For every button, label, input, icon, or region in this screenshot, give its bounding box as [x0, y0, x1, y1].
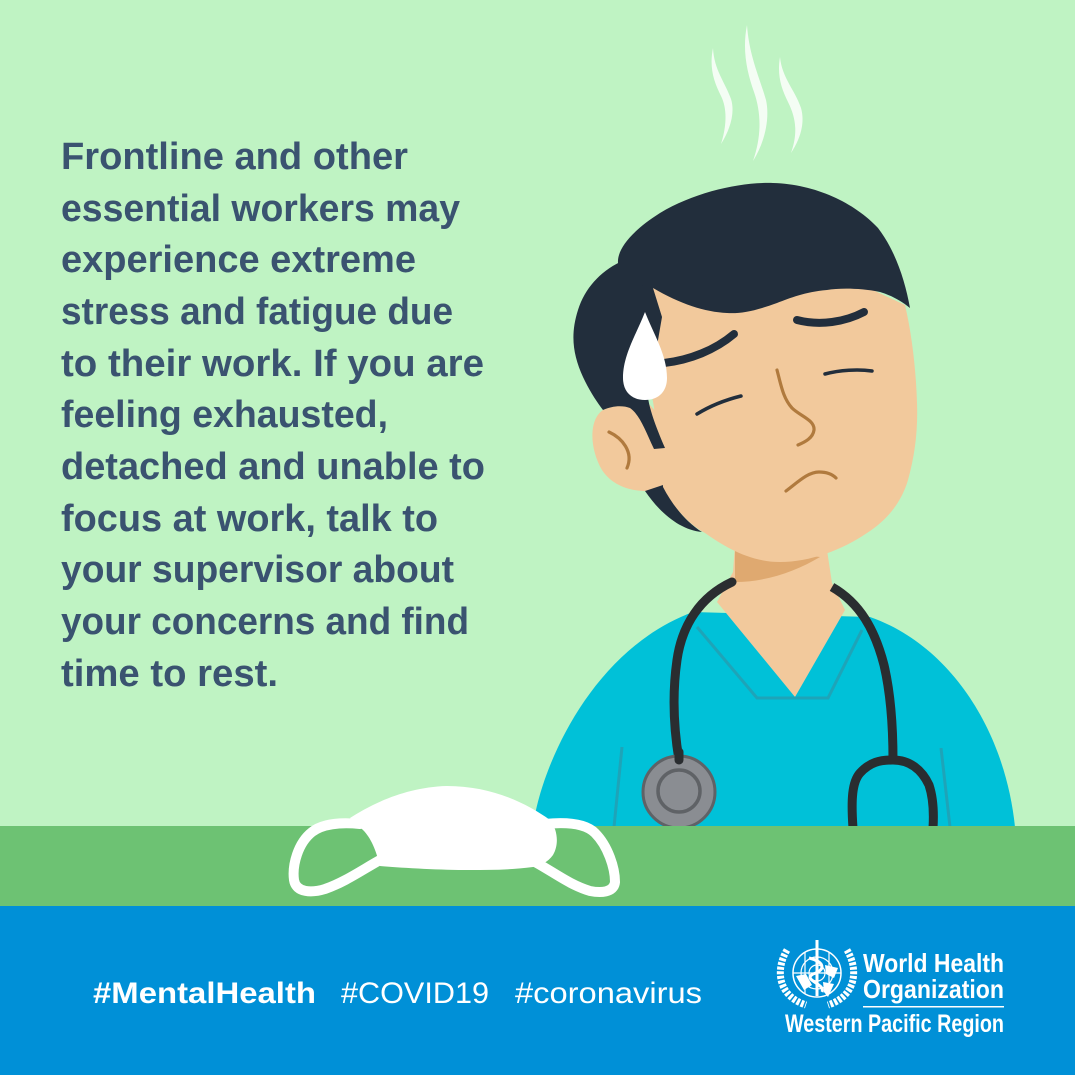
neck	[717, 545, 845, 697]
right eyebrow	[797, 312, 864, 323]
text block: main message: your supervisor about	[61, 549, 454, 591]
collar lines	[697, 627, 862, 698]
scrub side seams	[614, 747, 950, 827]
hashtags: #COVID19	[341, 977, 489, 1010]
icon: sweat drop	[623, 312, 667, 400]
logo: WHO Western Pacific Region: Organization	[863, 974, 1004, 1004]
text block: main message: to their work. If you are	[61, 343, 484, 385]
logo: WHO Western Pacific Region: Western Pacific Region	[785, 1010, 1004, 1038]
text block: main message: experience extreme	[61, 239, 416, 281]
text block: main message: stress and fatigue due	[61, 291, 453, 333]
text block: main message: time to rest.	[61, 653, 278, 695]
nose	[777, 370, 814, 445]
torso: teal scrubs	[533, 612, 1015, 827]
back hair lower	[645, 485, 702, 532]
hashtags: #coronavirus	[515, 977, 702, 1010]
text block: main message: your concerns and find	[61, 601, 469, 643]
illustration: health worker	[533, 183, 1015, 828]
logo: WHO Western Pacific Region	[780, 940, 1004, 1038]
icon: steam above head	[712, 25, 803, 161]
stethoscope tube left	[674, 582, 732, 760]
desk: green band	[0, 826, 1075, 906]
text block: main message: detached and unable to	[61, 446, 485, 488]
text block: main message: focus at work, talk to	[61, 498, 438, 540]
icon: face mask	[294, 786, 615, 892]
face	[647, 270, 917, 562]
mouth	[786, 472, 836, 491]
right eye	[825, 370, 872, 374]
ear	[592, 404, 690, 491]
left eyebrow	[664, 334, 734, 363]
left eye	[697, 396, 741, 414]
hashtags	[93, 977, 702, 1010]
text block: main message: Frontline and other	[61, 136, 408, 178]
neck shadow	[735, 548, 820, 582]
stethoscope chest piece	[643, 752, 715, 828]
footer: blue band	[0, 906, 1075, 1075]
hair back and sideburn	[573, 262, 665, 449]
stethoscope tube right	[832, 587, 893, 760]
hair top	[618, 183, 910, 313]
text block: main message	[61, 136, 485, 695]
ear line	[609, 432, 629, 468]
logo text: World Health	[863, 948, 1004, 978]
icon: WHO emblem	[780, 940, 854, 1005]
stethoscope ear loop	[852, 760, 933, 828]
text block: main message: essential workers may	[61, 188, 460, 230]
hashtags: #MentalHealth	[93, 977, 316, 1010]
text block: main message: feeling exhausted,	[61, 394, 388, 436]
